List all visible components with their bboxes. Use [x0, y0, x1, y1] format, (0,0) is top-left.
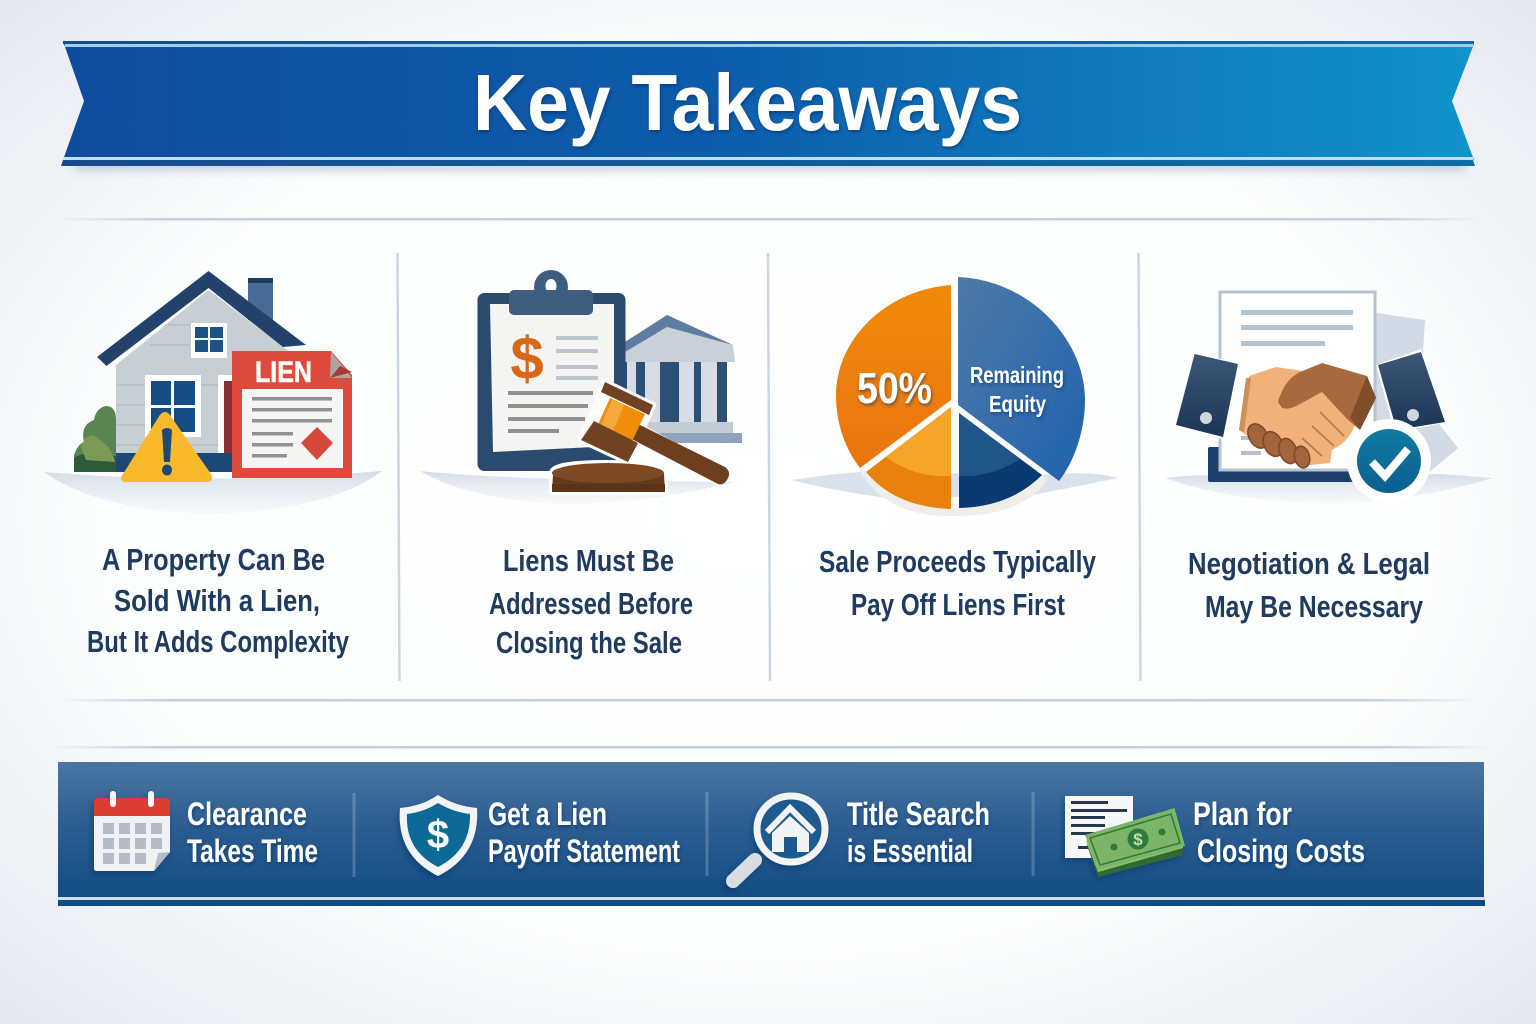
text: get a lien payoff statement: [488, 796, 680, 869]
text: plan for closing costs: Plan for: [1193, 796, 1292, 832]
panel: sale proceeds: [792, 277, 1118, 622]
icon: clipboard, bank and gavel: [420, 270, 742, 504]
chart: equity pie: [792, 277, 1118, 516]
panel: liens must be addressed: [420, 270, 742, 660]
icon: house with lien document and warning: LIEN: [255, 356, 312, 389]
text: sale proceeds pay off liens: [819, 544, 1097, 622]
text: title search is essential: is Essential: [847, 833, 973, 869]
text: clearance takes time: Takes Time: [187, 833, 318, 869]
chart: equity pie: Remaining: [970, 362, 1064, 388]
text: clearance takes time: [187, 796, 318, 869]
text: title search is essential: [847, 796, 990, 869]
text: liens must be addressed: [489, 543, 693, 660]
text: negotiation and legal: [1188, 546, 1430, 624]
text: property can be sold with a lien: Sold With a Lien,: [114, 583, 320, 618]
text: liens must be addressed: Closing the Sale: [496, 625, 682, 660]
icon: house with lien document and warning: [44, 271, 382, 514]
icon: handshake over document with checkmark: [1165, 292, 1493, 503]
tip: title search: [733, 796, 990, 881]
text: property can be sold with a lien: A Property Can Be: [102, 542, 325, 577]
text: get a lien payoff statement: Payoff Statement: [488, 833, 680, 869]
chart: equity pie: Equity: [989, 391, 1046, 417]
icon: calendar: [94, 791, 170, 871]
text: sale proceeds pay off liens: Pay Off Liens First: [851, 587, 1065, 622]
text: liens must be addressed: Liens Must Be: [503, 543, 674, 578]
panel: property with lien: [44, 271, 382, 659]
chart: equity pie: 50%: [857, 364, 932, 413]
text: get a lien payoff statement: Get a Lien: [488, 796, 607, 832]
text: property can be sold with a lien: [87, 542, 350, 659]
title text: Key Takeaways: [473, 58, 1022, 147]
tip: closing costs: [1065, 796, 1365, 877]
icon: shield with dollar: $: [427, 813, 449, 857]
text: plan for closing costs: Closing Costs: [1197, 833, 1365, 869]
text: negotiation and legal: Negotiation & Legal: [1188, 546, 1430, 581]
icon: document and cash: $: [1133, 830, 1143, 849]
title banner: [61, 41, 1475, 170]
text: liens must be addressed: Addressed Before: [489, 586, 693, 621]
panel: negotiation and legal: [1165, 292, 1493, 624]
text: property can be sold with a lien: But It Adds Complexity: [87, 624, 350, 659]
icon: shield with dollar: [400, 795, 477, 876]
text: clearance takes time: Clearance: [187, 796, 307, 832]
text: title search is essential: Title Search: [847, 796, 990, 832]
icon: clipboard, bank and gavel: $: [510, 325, 544, 392]
icon: document and cash: [1065, 796, 1185, 877]
icon: magnifier with house: [733, 796, 825, 881]
text: plan for closing costs: [1193, 796, 1365, 869]
text: negotiation and legal: May Be Necessary: [1205, 589, 1424, 624]
tip: payoff statement: [400, 795, 680, 876]
tip: clearance takes time: [94, 791, 318, 871]
text: sale proceeds pay off liens: Sale Proceeds Typically: [819, 544, 1097, 579]
bottom tips bar: [58, 762, 1485, 906]
